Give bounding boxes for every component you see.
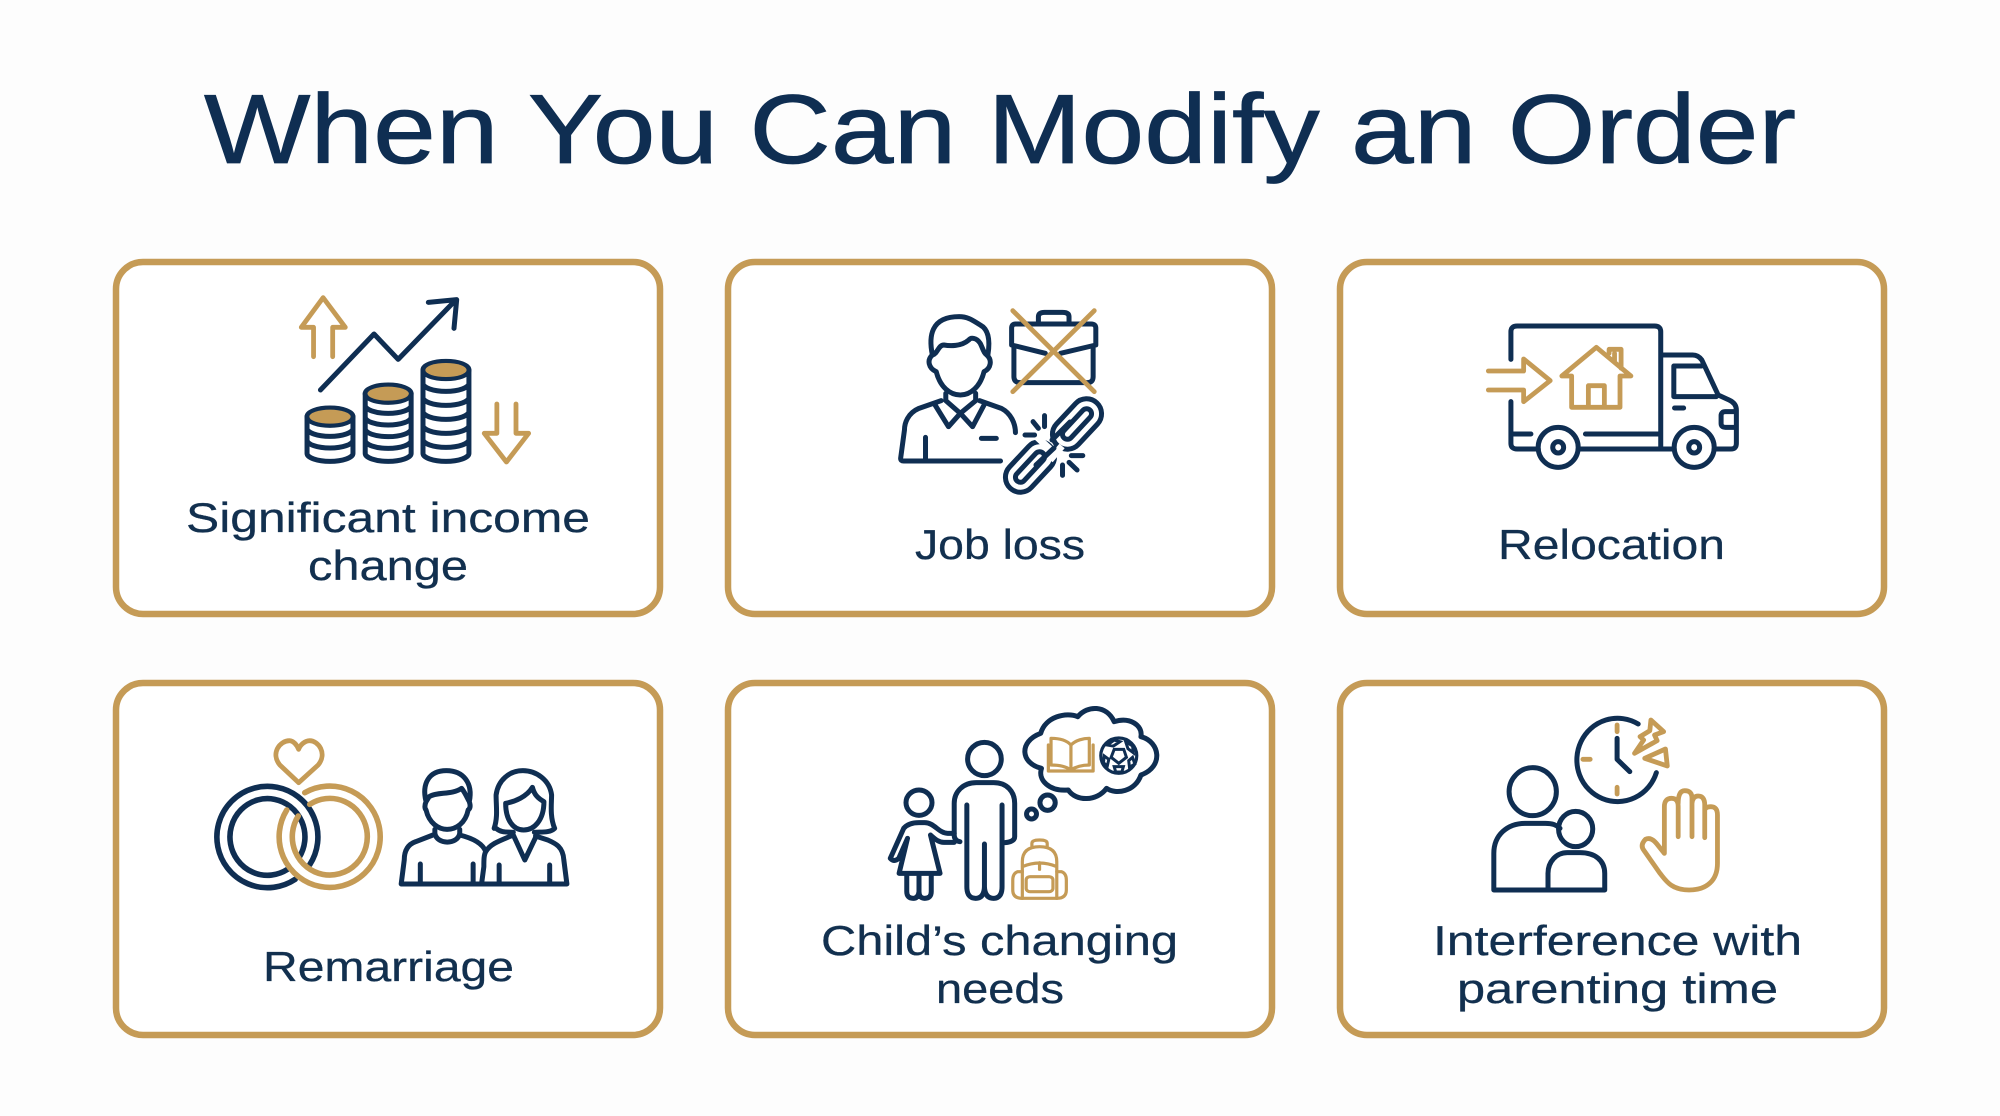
card frame (1340, 262, 1884, 614)
label: Interference with (1433, 917, 1802, 964)
label: needs (936, 965, 1064, 1012)
panel: remarriage (116, 683, 660, 1035)
label: Remarriage (263, 943, 514, 990)
icon: person, crossed briefcase, broken link (901, 311, 1108, 498)
card frame (728, 683, 1272, 1035)
panel: relocation (1340, 262, 1884, 614)
label: parenting time (1457, 965, 1778, 1012)
label (1433, 917, 1802, 1012)
icon: parent, child, thought bubble and backpack (890, 708, 1157, 898)
label: Job loss (915, 521, 1085, 568)
label: Relocation (1498, 521, 1725, 568)
label (186, 494, 590, 589)
icon: parent and child, clock, stop hand (1494, 718, 1717, 890)
panel: job loss (728, 262, 1272, 614)
label (821, 917, 1178, 1012)
label: change (308, 542, 468, 589)
card frame (116, 683, 660, 1035)
icon: rising coins and arrows (301, 298, 529, 462)
card frame (116, 262, 660, 614)
panel: child's changing needs (728, 683, 1272, 1035)
label: Child’s changing (821, 917, 1178, 964)
title: When You Can Modify an Order (204, 74, 1796, 184)
card frame (1340, 683, 1884, 1035)
label: Significant income (186, 494, 590, 541)
icon: wedding rings, heart and couple (217, 741, 567, 888)
panel: interference with parenting time (1340, 683, 1884, 1035)
panel: significant income change (116, 262, 660, 614)
icon: moving truck with house (1488, 326, 1736, 467)
card frame (728, 262, 1272, 614)
